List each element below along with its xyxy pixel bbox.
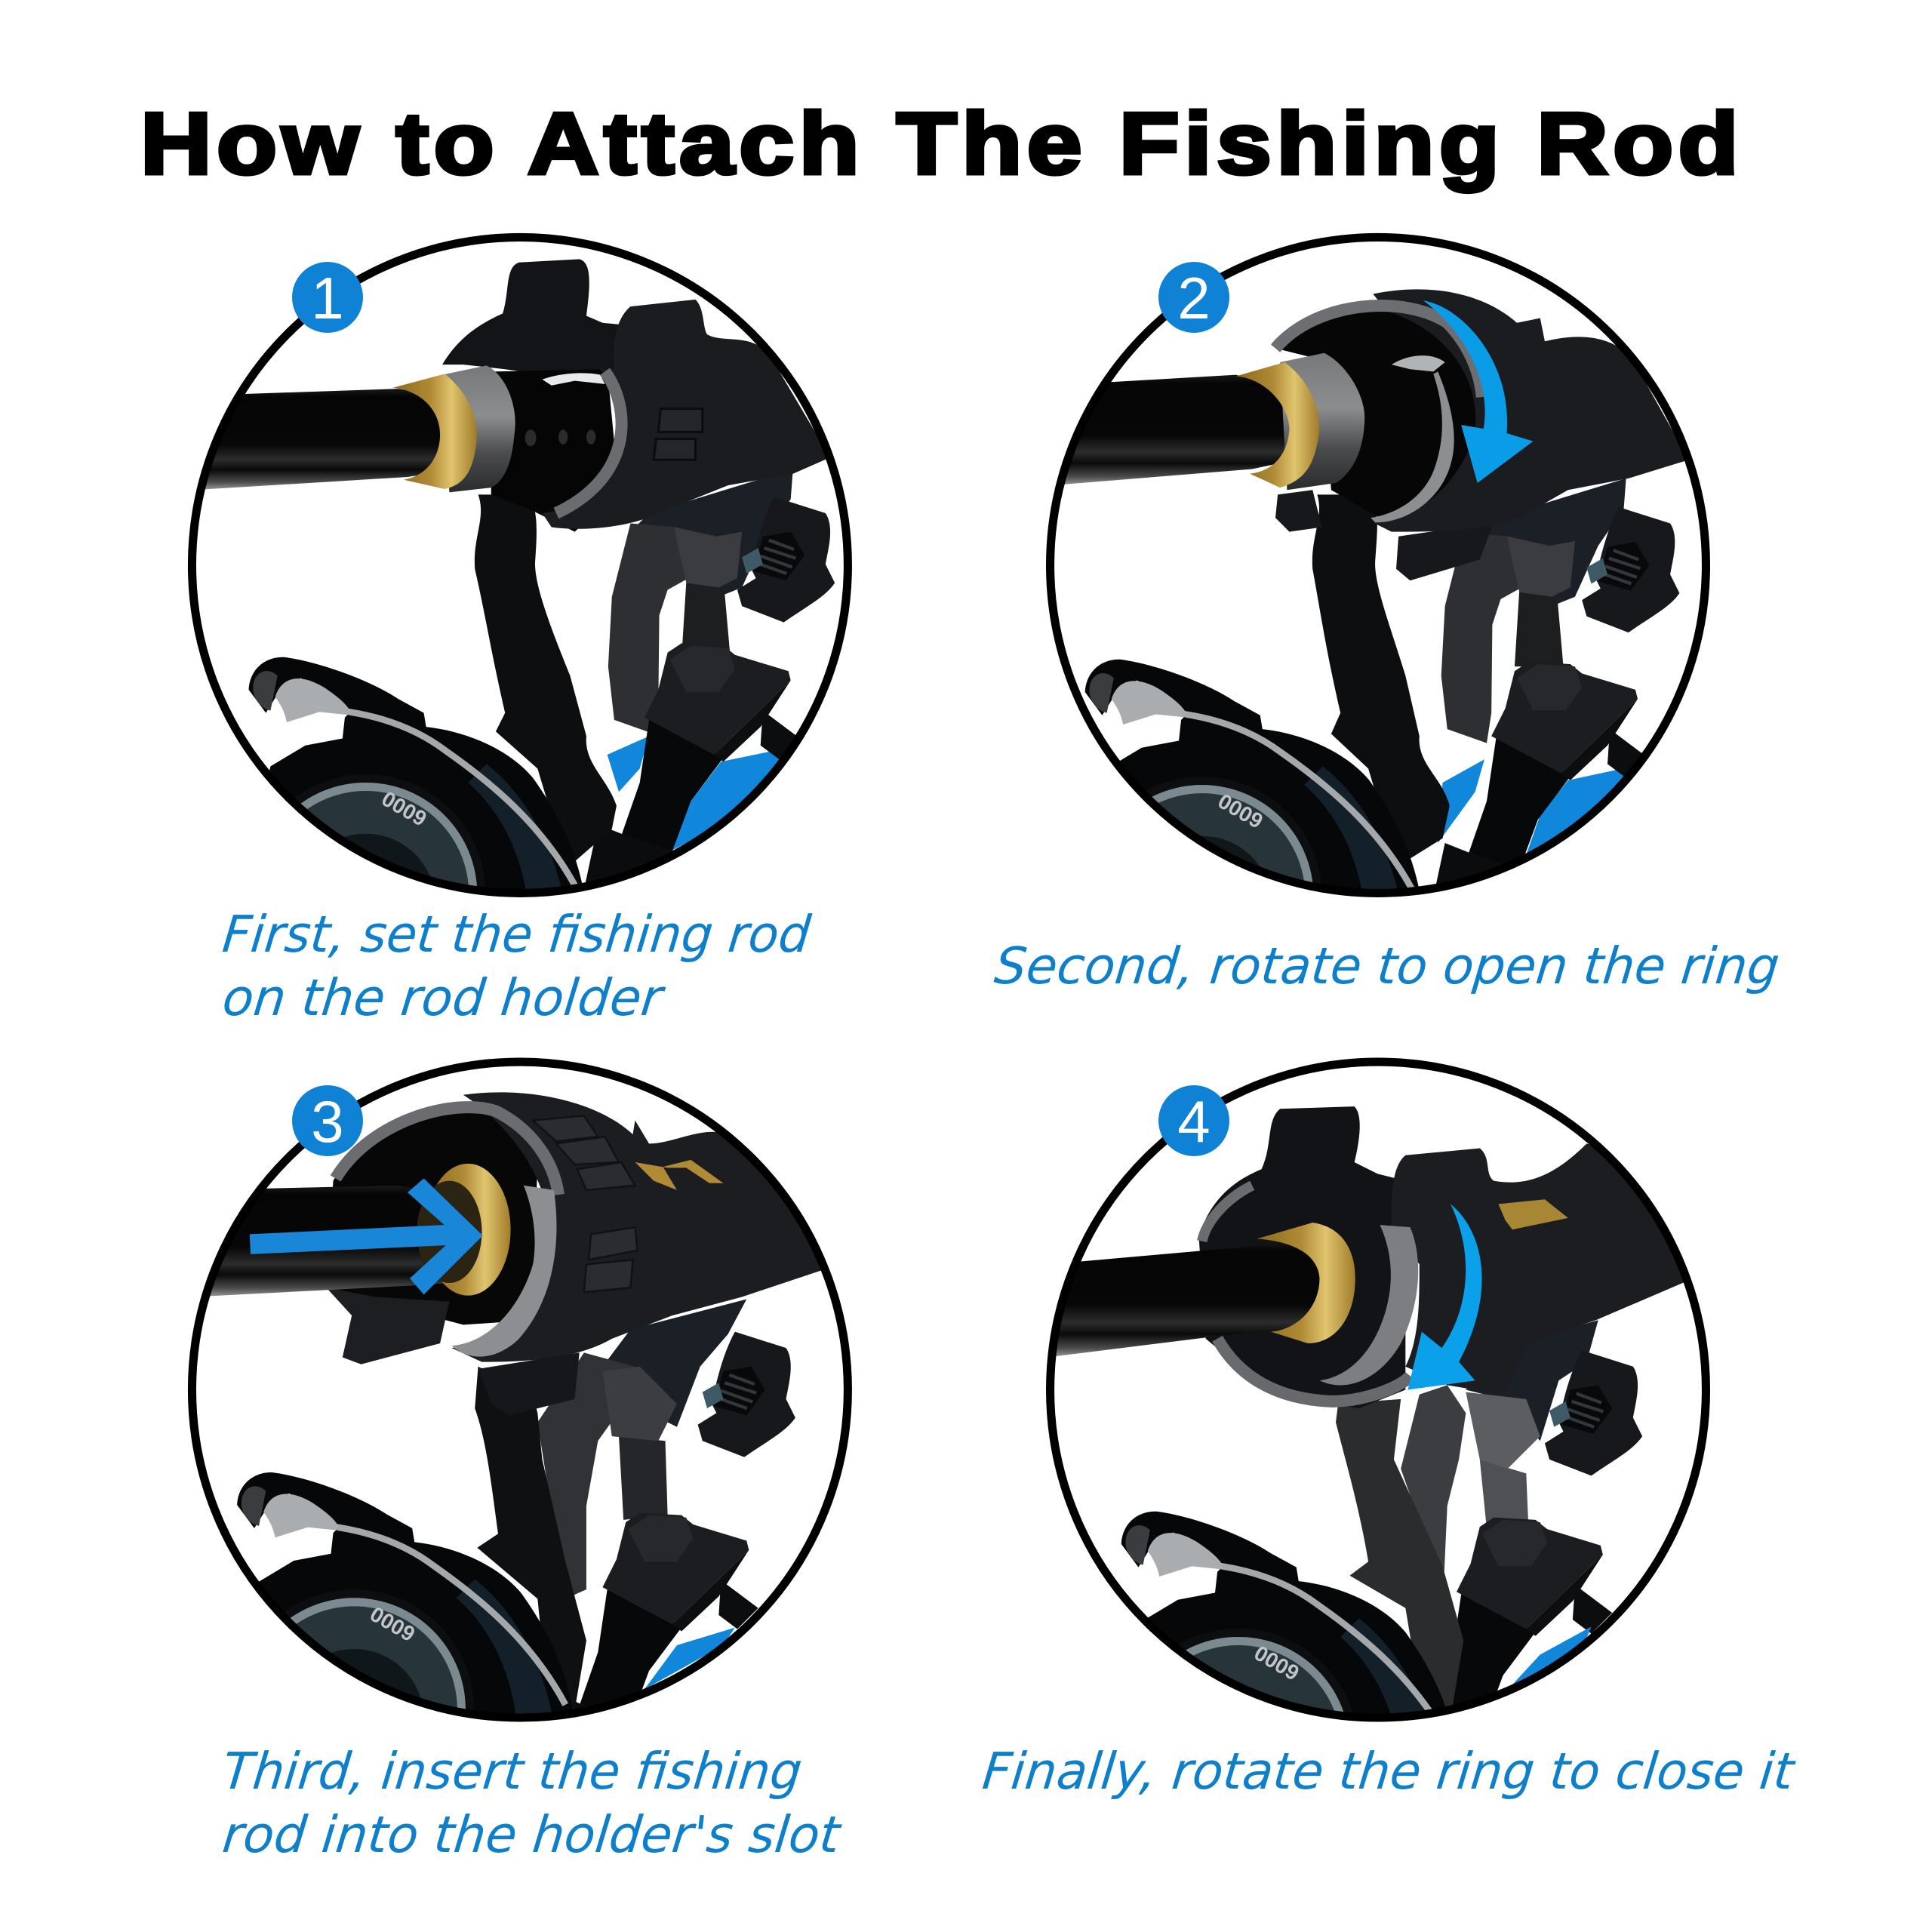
grey bracket xyxy=(537,1352,645,1598)
shaft xyxy=(602,1367,677,1441)
arm xyxy=(475,1367,586,1710)
caption 1: on the rod holder xyxy=(220,968,669,1027)
caption 3: rod into the holder's slot xyxy=(220,1805,844,1864)
rod xyxy=(194,1186,449,1297)
knob xyxy=(1545,1350,1642,1475)
rear hoop and tab xyxy=(1198,1106,1405,1408)
mount bracket xyxy=(1441,478,1626,743)
rear ring grey edge top xyxy=(1202,1186,1252,1241)
caption 3: Third, insert the fishing xyxy=(220,1742,804,1801)
gold ring xyxy=(392,374,477,489)
arrow: close xyxy=(1407,1204,1482,1390)
ribs xyxy=(533,1115,638,1292)
photo: rod inserted into slot xyxy=(194,1092,826,1829)
blue kayak hull xyxy=(608,736,789,851)
mount plate xyxy=(584,643,800,889)
badge 2: 2 xyxy=(1177,265,1211,331)
lower lip xyxy=(478,1352,580,1415)
caption 3 xyxy=(220,1742,844,1864)
ring grey edge top xyxy=(1275,306,1482,397)
arrow shaft xyxy=(250,1224,466,1254)
ring inner blade xyxy=(451,1186,556,1357)
badge 1: 1 xyxy=(311,265,344,331)
ring edge xyxy=(556,371,622,513)
arrow head xyxy=(408,1179,483,1294)
rear ring grey edge xyxy=(1217,1339,1410,1401)
holder body xyxy=(1392,1143,1694,1395)
connector to knob xyxy=(602,1300,746,1427)
rod xyxy=(1048,1241,1322,1357)
blue kayak hull xyxy=(645,1628,735,1689)
circle frame xyxy=(1051,237,1706,893)
rear hoop tabs xyxy=(1275,490,1494,580)
connector to knob xyxy=(1466,1320,1598,1441)
circle frame xyxy=(192,237,848,893)
badge 4: 4 xyxy=(1177,1088,1211,1155)
post xyxy=(619,1436,668,1520)
holder body xyxy=(542,300,830,529)
blue kayak hull xyxy=(1438,759,1633,854)
ribs xyxy=(654,409,703,460)
ring interior xyxy=(326,1107,537,1324)
rod xyxy=(1053,375,1284,485)
mount bracket xyxy=(608,469,793,734)
seat holes xyxy=(525,429,595,446)
reel xyxy=(249,657,583,889)
rod xyxy=(194,389,445,490)
gold ring xyxy=(1236,362,1319,488)
arm xyxy=(1336,1399,1463,1710)
rod holder tab xyxy=(326,1287,449,1364)
panel: step 3 xyxy=(192,1062,848,1829)
ring grey edge xyxy=(336,1107,558,1195)
knob xyxy=(737,497,835,623)
ring inner blade xyxy=(1371,371,1454,522)
photo: ring rotated open xyxy=(1053,289,1689,1016)
arm xyxy=(475,494,617,862)
gold ring xyxy=(425,1164,511,1296)
shaft xyxy=(1466,1392,1540,1469)
photo: ring closed xyxy=(1048,1106,1694,1868)
reel seat xyxy=(491,369,619,532)
circle frame xyxy=(192,1062,848,1718)
mount plate xyxy=(542,1513,758,1759)
knob xyxy=(698,1332,795,1457)
panel: step 1 xyxy=(187,232,852,897)
badge 3: 3 xyxy=(311,1088,344,1155)
caption 1: First, set the fishing rod xyxy=(220,905,814,964)
rear hoop xyxy=(442,259,626,374)
front ring blade xyxy=(1319,1225,1418,1385)
caption 1 xyxy=(220,905,814,1027)
reel xyxy=(224,1472,575,1829)
window highlight xyxy=(542,373,605,386)
gold ring xyxy=(1257,1223,1355,1343)
reel xyxy=(1085,660,1419,889)
gold ring behind xyxy=(635,1160,723,1190)
holder body xyxy=(451,1092,826,1362)
badge 3 xyxy=(292,1085,363,1156)
caption 2: Second, rotate to open the ring xyxy=(992,937,1782,995)
knob xyxy=(1582,507,1679,632)
badge 4 xyxy=(1158,1085,1229,1156)
mount plate xyxy=(1396,1518,1612,1764)
panel: step 2 xyxy=(1051,237,1706,1016)
collar xyxy=(1280,353,1364,490)
badge 2 xyxy=(1158,262,1229,333)
blue kayak hull xyxy=(1512,1626,1591,1684)
mount plate xyxy=(1436,663,1642,884)
post xyxy=(1480,1460,1528,1529)
arm xyxy=(1312,494,1450,862)
arrow: rotate xyxy=(1423,300,1534,483)
reel seat and ring interior xyxy=(1275,312,1476,516)
badge 1 xyxy=(292,262,363,333)
circle frame xyxy=(1051,1062,1706,1718)
holder body xyxy=(1373,289,1689,532)
grey bracket xyxy=(1401,1385,1466,1608)
collar xyxy=(442,365,515,492)
photo: rod in holder xyxy=(205,259,835,889)
reel xyxy=(1108,1512,1459,1868)
panel: step 4 xyxy=(1048,1062,1706,1868)
white gap xyxy=(1392,355,1445,371)
gold ring hole xyxy=(417,1181,481,1283)
caption 4: Finally, rotate the ring to close it xyxy=(980,1742,1798,1801)
arrow: insert xyxy=(250,1179,483,1294)
gold ring behind xyxy=(1498,1199,1568,1229)
title: How to Attach The Fishing Rod xyxy=(140,95,1739,192)
